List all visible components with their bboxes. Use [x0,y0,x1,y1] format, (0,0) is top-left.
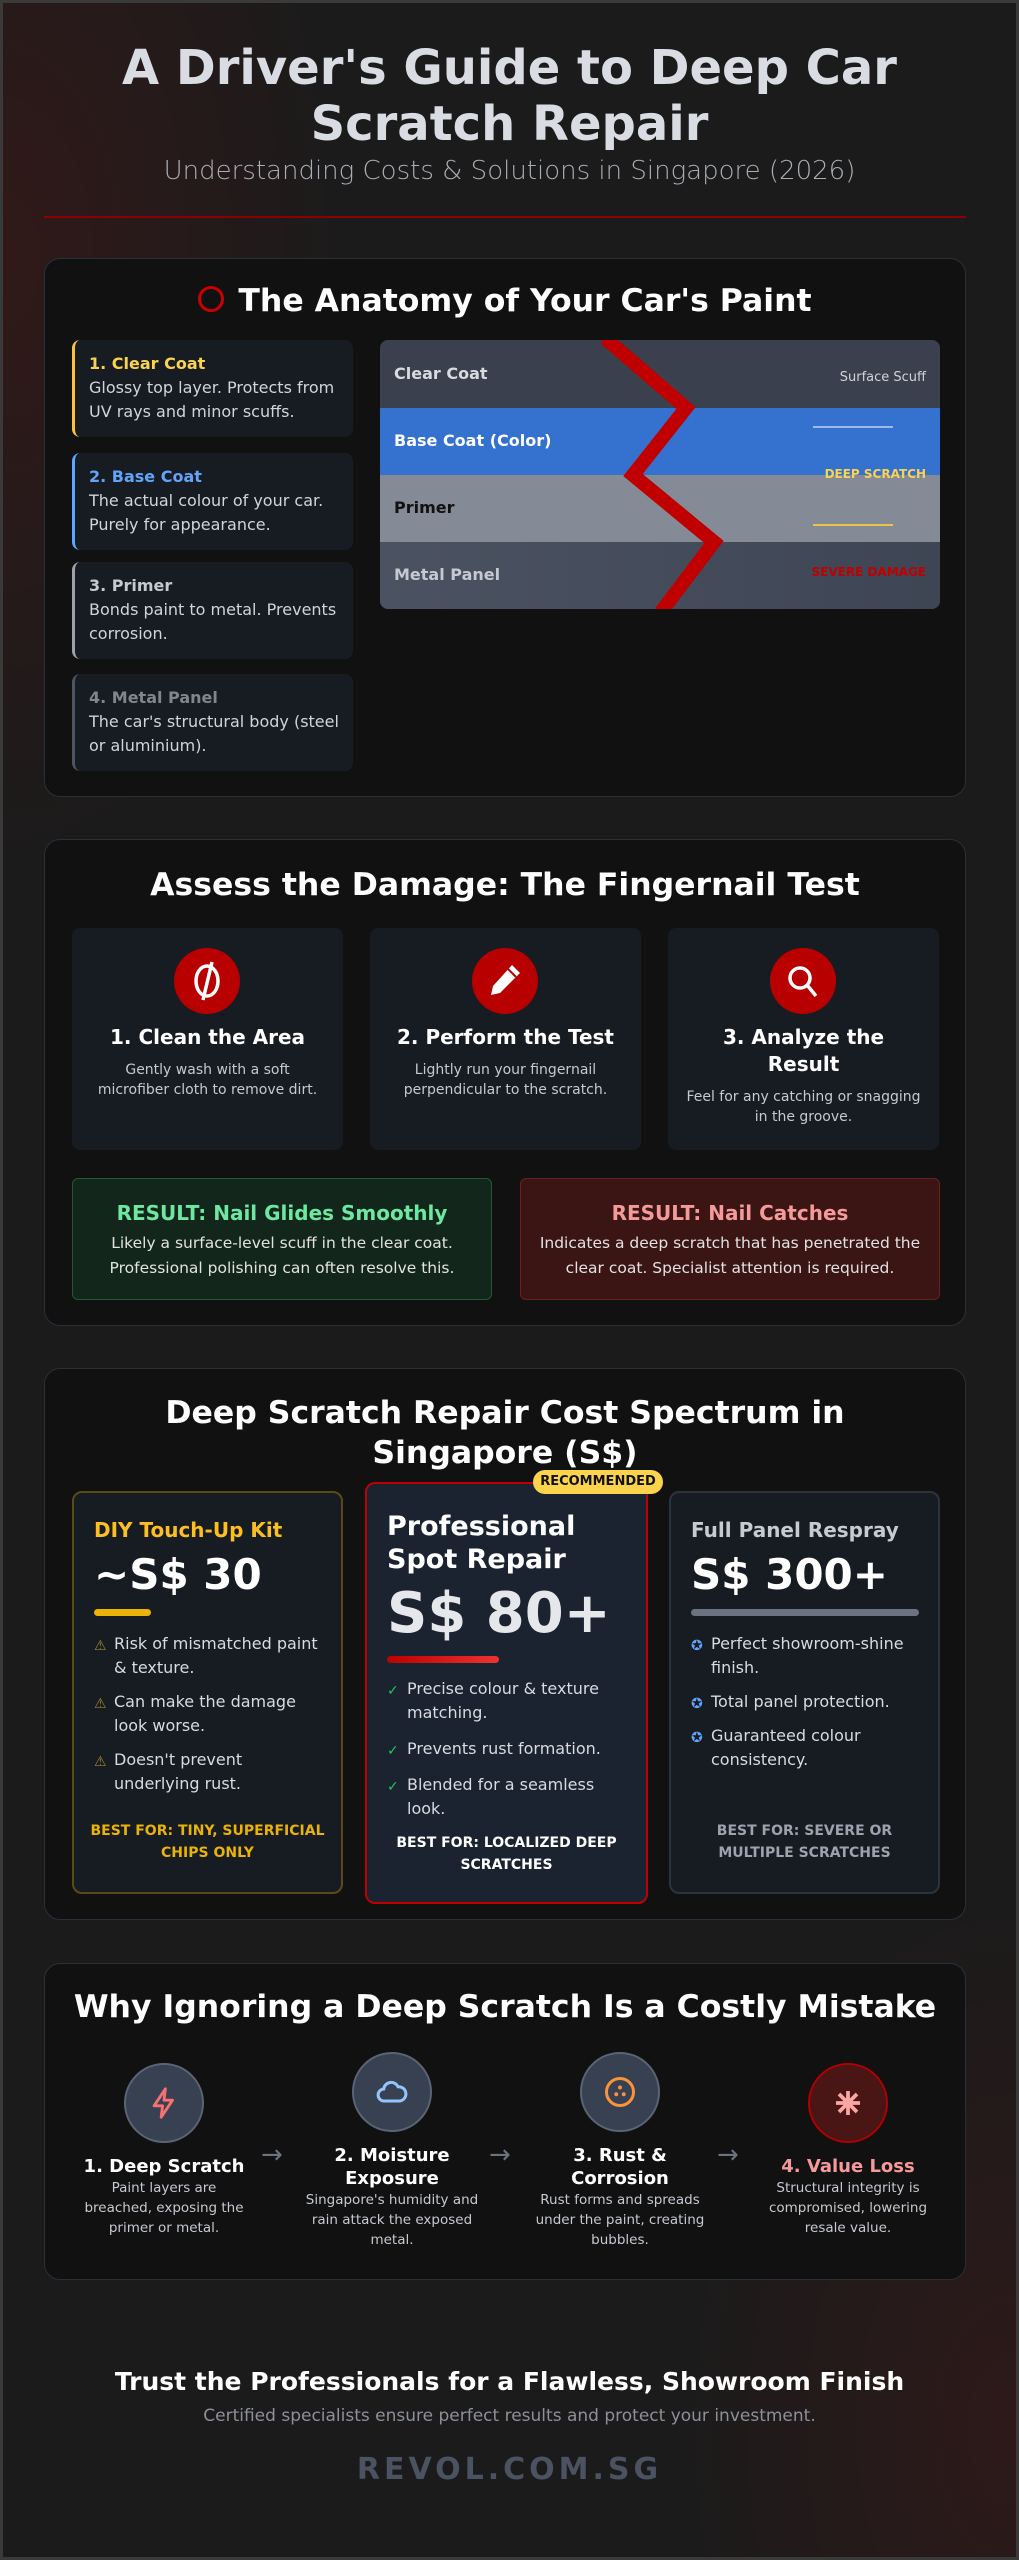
layer diagram [380,340,940,609]
card: full respray: ✪ [691,1638,703,1654]
arrow: → [489,2140,511,2170]
card: full respray [669,1491,940,1894]
footer heading: Trust the Professionals for a Flawless, Showroom Finish [115,2367,904,2396]
brand: REVOL.COM.SG [357,2452,662,2487]
icon: clean [174,948,240,1014]
step 1: microfiber cloth to remove dirt. [98,1082,317,1098]
step: rust: under the paint, creating [536,2212,704,2228]
subtitle: Understanding Costs & Solutions in Singapore (2026) [164,156,855,186]
card: clear coat [72,340,353,437]
card: full respray: S$ 300+ [691,1550,888,1599]
panel: fingernail test [44,839,966,1326]
card: DIY: ⚠ [94,1754,107,1770]
step 3: Feel for any catching or snagging [686,1089,921,1105]
card: clear coat: 1. Clear Coat [89,354,205,373]
heading: fingernail: Assess the Damage: The Fingernail Test [150,867,860,903]
result: smooth: Likely a surface-level scuff in the clear coat. [111,1234,453,1252]
card: professional: Precise colour & texture matching. [407,1679,599,1722]
step: rust: Corrosion [571,2168,669,2189]
card: full respray: Full Panel Respray [691,1518,899,1542]
step: moisture: rain attack the exposed [312,2212,472,2228]
result: catches: Indicates a deep scratch that has penetrated the [540,1234,920,1252]
step: value loss: compromised, lowering [769,2200,927,2216]
layer diagram: Primer [394,498,455,517]
card: base coat [72,453,353,550]
card: metal panel: The car's structural body (steel or aluminium). [89,712,339,755]
card: DIY: Can make the damage look worse. [114,1692,296,1735]
title: A Driver's Guide to Deep Car [122,40,897,96]
result: smooth [72,1178,492,1300]
card: professional: ✓ [387,1743,399,1759]
step 1: Gently wash with a soft [125,1062,290,1078]
card: base coat: 2. Base Coat [89,467,202,486]
step: moisture: 2. Moisture [334,2145,450,2166]
card: DIY: Doesn't prevent underlying rust. [114,1750,242,1793]
card: professional: Blended for a seamless look. [407,1775,594,1818]
heading: cost: Singapore (S$) [372,1435,638,1471]
result: catches: clear coat. Specialist attention is required. [566,1259,894,1277]
layer diagram: Surface Scuff [840,370,927,385]
step 2: 2. Perform the Test [397,1025,614,1049]
step: value loss: resale value. [805,2220,891,2236]
step: deep scratch: 1. Deep Scratch [84,2156,244,2177]
card: professional: Prevents rust formation. [407,1739,601,1758]
step 1 [72,928,343,1150]
title: Scratch Repair [311,96,708,152]
badge: recommended: RECOMMENDED [540,1474,656,1489]
icon: rust [580,2052,660,2132]
icon: cloud [352,2052,432,2132]
step: deep scratch [84,2063,244,2236]
card: DIY: ~S$ 30 [94,1550,262,1599]
card: DIY: BEST FOR: TINY, SUPERFICIAL CHIPS ONLY [90,1823,324,1861]
card: primer [72,562,353,659]
heading: cost: Deep Scratch Repair Cost Spectrum in [165,1395,845,1431]
panel: cost spectrum [44,1368,966,1920]
panel: anatomy [44,258,966,797]
card: professional: S$ 80+ [387,1581,611,1646]
step: rust [536,2052,704,2248]
icon: pen [472,948,538,1014]
card: full respray: Perfect showroom-shine finish. [711,1634,904,1677]
step: moisture: Exposure [345,2168,439,2189]
card: DIY: ⚠ [94,1638,107,1654]
step 3 [668,928,939,1150]
card: professional: Spot Repair [387,1544,566,1575]
title [122,40,897,152]
step: value loss [769,2063,927,2236]
card: full respray: Guaranteed colour consistency. [711,1726,861,1769]
card: full respray: Total panel protection. [711,1692,890,1711]
card: metal panel [72,674,353,771]
icon: value loss [808,2063,888,2143]
card: professional: ✓ [387,1683,399,1699]
card: primer: 3. Primer [89,576,172,595]
icon: magnifier [770,948,836,1014]
step: deep scratch: Paint layers are [112,2180,216,2196]
step: rust: Rust forms and spreads [540,2192,700,2208]
card: base coat: The actual colour of your car. Purely for appearance. [89,491,323,534]
card: professional: ✓ [387,1779,399,1795]
footer subtitle: Certified specialists ensure perfect results and protect your investment. [203,2406,816,2426]
card: full respray: ✪ [691,1730,703,1746]
step: deep scratch: primer or metal. [109,2220,219,2236]
card: full respray: ✪ [691,1696,703,1712]
card: professional: Professional [387,1511,575,1542]
heading: cost [165,1395,845,1471]
badge: recommended [533,1470,663,1494]
card: professional: BEST FOR: LOCALIZED DEEP SCRATCHES [396,1835,617,1873]
layer diagram: Base Coat (Color) [394,431,551,450]
result: catches [520,1178,940,1300]
card: DIY [72,1491,343,1894]
step: value loss: Structural integrity is [776,2180,920,2196]
step: deep scratch: breached, exposing the [84,2200,244,2216]
step: value loss: 4. Value Loss [781,2156,915,2177]
result: smooth: RESULT: Nail Glides Smoothly [117,1201,447,1225]
card: professional [365,1482,648,1904]
card: DIY: DIY Touch-Up Kit [94,1518,282,1542]
arrow: → [261,2140,283,2170]
card: full respray: BEST FOR: SEVERE OR MULTIPLE SCRATCHES [717,1823,892,1861]
result: smooth: Professional polishing can often resolve this. [110,1259,454,1277]
step 3: in the groove. [755,1109,852,1125]
icon: bolt [124,2063,204,2143]
layer diagram: Metal Panel [394,565,500,584]
step: moisture: Singapore's humidity and [306,2192,478,2208]
card: clear coat: Glossy top layer. Protects from UV rays and minor scuffs. [89,378,334,421]
heading: anatomy: The Anatomy of Your Car's Paint [238,283,812,319]
result: catches: RESULT: Nail Catches [612,1201,848,1225]
step 2: perpendicular to the scratch. [404,1082,607,1098]
step: rust: bubbles. [591,2232,649,2248]
step 2: Lightly run your fingernail [415,1062,596,1078]
panel: costly mistake [44,1963,966,2280]
arrow: → [717,2140,739,2170]
card: primer: Bonds paint to metal. Prevents corrosion. [89,600,336,643]
step 3: Result [768,1052,839,1076]
heading: mistake: Why Ignoring a Deep Scratch Is a Costly Mistake [74,1989,936,2025]
step 2 [370,928,641,1150]
step 3: 3. Analyze the [723,1025,884,1049]
layer diagram: DEEP SCRATCH [825,467,926,481]
step: rust: 3. Rust & [573,2145,667,2166]
layer diagram: SEVERE DAMAGE [812,565,926,579]
card: metal panel: 4. Metal Panel [89,688,218,707]
card: DIY: ⚠ [94,1696,107,1712]
step 1: 1. Clean the Area [110,1025,305,1049]
layer diagram: Clear Coat [394,364,488,383]
card: DIY: Risk of mismatched paint & texture. [114,1634,318,1677]
step: moisture: metal. [370,2232,414,2248]
step: moisture [306,2052,478,2248]
